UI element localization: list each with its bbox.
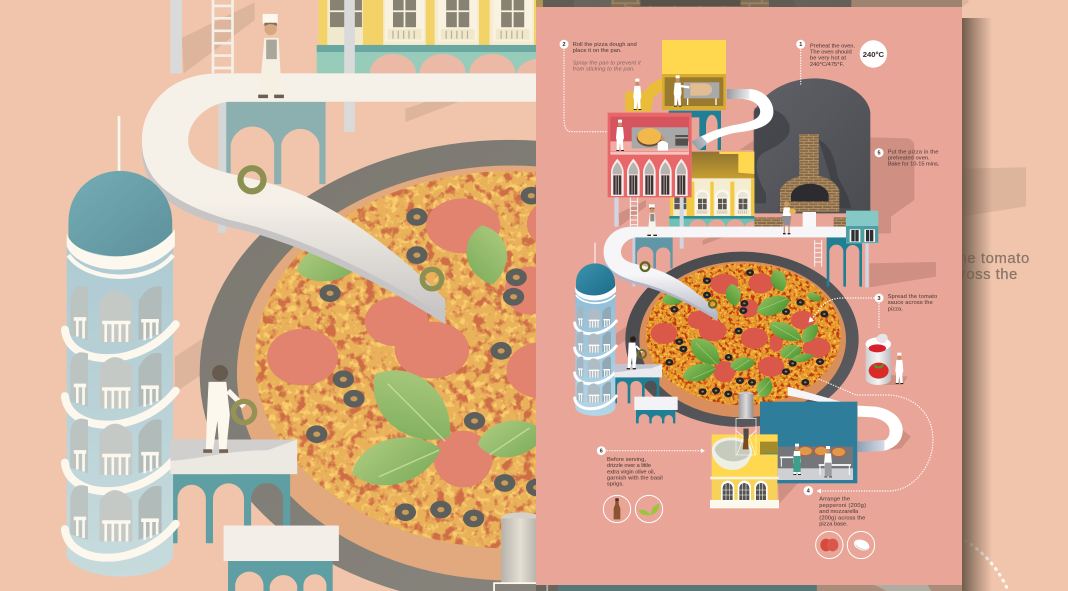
oven road shadow [754, 108, 851, 208]
step 4 text [819, 497, 866, 527]
step 2 text: from sticking to the pan. [573, 67, 635, 73]
yellow rolling room [662, 40, 726, 110]
red building [608, 113, 692, 197]
step 3 text: sauce across the [888, 300, 933, 306]
step 4 text: Arrange the [819, 497, 850, 503]
step 3 text: pizza. [888, 306, 903, 312]
step number badges: 3 [878, 296, 880, 302]
support posts [614, 197, 684, 237]
antenna [593, 243, 596, 268]
icon: olive oil bottle [603, 495, 631, 523]
step 5 text: Put the pizza in the [888, 149, 938, 155]
step number badges [560, 40, 884, 495]
tower dome [576, 263, 615, 295]
can chef [895, 353, 903, 384]
step 4 text: and mozzarella [819, 509, 859, 515]
olive ring lower [709, 300, 716, 308]
step 4 text: pepperoni (200g) [819, 503, 866, 509]
nurse chef [647, 204, 657, 236]
stairs [625, 78, 662, 112]
step 3 text [888, 294, 937, 312]
step 6 text [607, 457, 663, 488]
crust [639, 261, 846, 417]
step 6 text: Before serving, [607, 457, 646, 463]
card shadow [962, 18, 992, 591]
oven arch [780, 175, 839, 212]
step number badges: 6 [600, 449, 603, 455]
lower arcade [614, 377, 659, 403]
temperature badge: 240°C [863, 50, 885, 59]
temperature badge [860, 40, 887, 68]
icon: basil sprig [635, 495, 663, 523]
pizzas on kitchen wall [798, 446, 846, 457]
balcony platform [614, 364, 662, 377]
blue kitchen building [760, 402, 857, 483]
step 6 text: garnish with the basil [607, 475, 663, 481]
olives [665, 269, 828, 397]
road post [680, 237, 684, 249]
yellow oil building [710, 434, 779, 508]
step 1 text [810, 43, 855, 68]
pan [625, 252, 859, 427]
tower floors [575, 306, 616, 409]
cheese [646, 263, 841, 405]
step number badges: 2 [562, 42, 566, 48]
pepperoni [651, 273, 831, 382]
tomato can [866, 334, 903, 385]
recipe illustration and steps [560, 40, 940, 559]
step number badges: 4 [807, 489, 810, 495]
step 1 text: 240°C/475°F. [810, 62, 844, 68]
oven chimney [799, 134, 819, 177]
tower and balcony [575, 243, 903, 508]
step 1 text: The oven should [810, 50, 852, 56]
step 4 text: (200g) across the [819, 515, 865, 521]
icon: pepperoni [816, 531, 843, 559]
tomato label [869, 363, 889, 379]
left arcade post [632, 237, 635, 287]
man carrying olive ring [627, 336, 646, 369]
small platform with arcade [634, 397, 678, 423]
step 2 text: place it on the pan. [573, 48, 622, 54]
right arcade [827, 237, 862, 287]
upper ladder [630, 197, 638, 227]
step 3 text: Spread the tomato [888, 294, 937, 300]
step 1 text: be very hot at [810, 56, 846, 62]
arrowheads [701, 316, 821, 494]
step number badges: 5 [878, 151, 880, 157]
step 2 text [573, 42, 641, 73]
post by road [803, 212, 816, 229]
walking chef [633, 79, 641, 110]
shaded strips above and below card [536, 0, 962, 591]
oven mouth [791, 184, 829, 201]
step 5 text: preheated oven. [888, 155, 930, 161]
right post [865, 237, 869, 287]
pizza on pan [625, 252, 859, 427]
ingredient icons [603, 495, 875, 559]
lower ladder [815, 240, 822, 267]
left arcade [635, 237, 673, 268]
cast shadows [616, 137, 936, 503]
baker holding dough [782, 201, 796, 234]
teal end building [846, 211, 878, 243]
step 4 text: pizza base. [819, 521, 848, 527]
teal plinth [669, 216, 754, 227]
oven base [753, 217, 846, 227]
step 6 text: drizzle over a little [607, 463, 651, 469]
lower arcades [632, 237, 869, 287]
icon: mozzarella [847, 531, 875, 559]
apron chef [793, 444, 801, 475]
olive ring upper [641, 262, 649, 271]
grey trousers chef [824, 446, 832, 477]
gold building [669, 152, 754, 227]
lower loop road [788, 387, 903, 452]
step 6 text: sprigs. [607, 482, 624, 488]
basil leaves [660, 267, 823, 400]
step 5 text [888, 149, 940, 168]
step 1 text: Preheat the oven. [810, 43, 855, 49]
dotted guide lines [564, 50, 933, 491]
oven [753, 78, 870, 227]
chef at table [616, 120, 624, 151]
step 2 text: Roll the pizza dough and [573, 42, 637, 48]
oil dispenser [736, 392, 756, 455]
step 6 text: extra virgin olive oil, [607, 469, 655, 475]
step number badges: 1 [799, 42, 802, 48]
step 2 text: Spray the pan to prevent it [573, 60, 641, 66]
main road [604, 201, 878, 321]
chef rolling [674, 75, 682, 107]
tower body [575, 290, 615, 416]
step 5 text: Bake for 10-15 mins. [888, 162, 940, 168]
recipe card [536, 7, 962, 585]
upper winding road [691, 89, 773, 151]
teal arcade under yellow room [669, 111, 721, 150]
upper buildings [608, 40, 816, 237]
bowl [712, 437, 752, 470]
